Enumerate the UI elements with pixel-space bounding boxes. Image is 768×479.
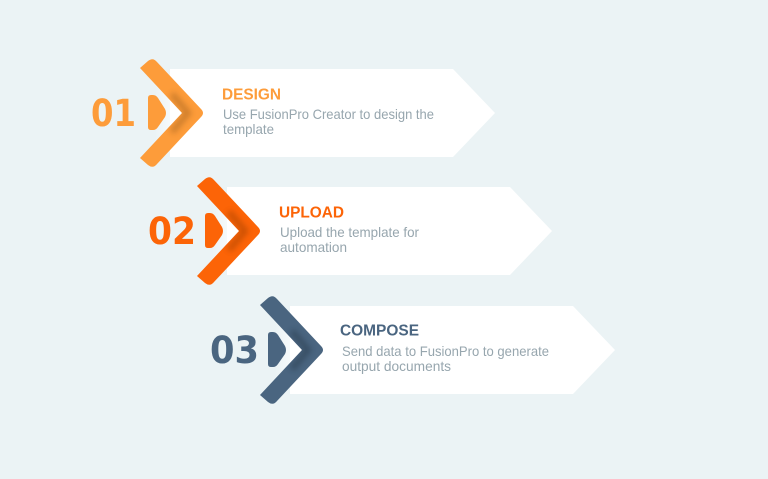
number 03: 03 xyxy=(210,329,259,372)
heading design: DESIGN xyxy=(222,86,281,104)
chevron 3 xyxy=(260,296,323,404)
notch glow 2 xyxy=(198,186,242,276)
chevron 1 xyxy=(140,59,203,167)
number 02: 02 xyxy=(148,210,196,253)
description 3: output documents xyxy=(342,358,451,374)
description 1: Use FusionPro Creator to design the xyxy=(223,106,434,122)
description 2: automation xyxy=(280,239,347,255)
heading upload: UPLOAD xyxy=(279,204,344,222)
arrow panel 2 xyxy=(227,187,552,275)
notch glow 3 xyxy=(261,305,305,395)
heading compose: COMPOSE xyxy=(340,322,419,340)
number 01: 01 xyxy=(91,92,136,135)
description 3: Send data to FusionPro to generate xyxy=(342,343,549,359)
play icon 3 xyxy=(268,332,286,367)
play icon 1 xyxy=(148,95,166,130)
play icon 2 xyxy=(205,213,223,248)
arrow panel 3 xyxy=(290,306,615,394)
chevron 2 xyxy=(197,177,260,285)
arrow panel 1 xyxy=(170,69,495,157)
description 2: Upload the template for xyxy=(280,224,419,240)
step 3: compose xyxy=(210,296,615,404)
step 1: design xyxy=(91,59,495,167)
notch glow 1 xyxy=(141,68,185,158)
description 1: template xyxy=(223,121,274,137)
step 2: upload xyxy=(148,177,552,285)
